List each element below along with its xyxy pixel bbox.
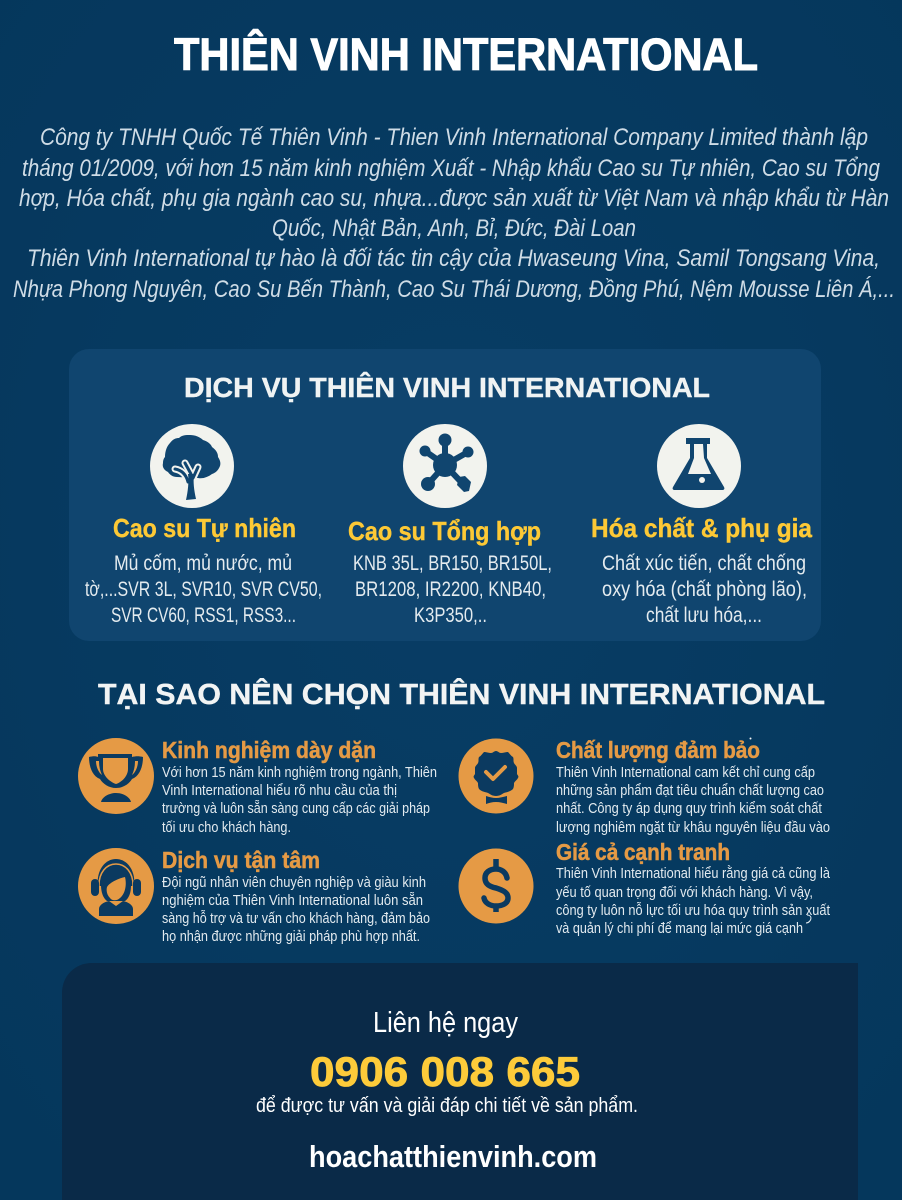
- description: Thiên Vinh International cam kết chỉ cung cấp: [556, 765, 815, 781]
- icon: trophy: [78, 738, 154, 814]
- icon: dollar: [458, 848, 534, 924]
- description: và quản lý chi phí để mang lại mức giá cạnh: [556, 921, 803, 937]
- description: họ nhận được những giải pháp phù hợp nhất.: [162, 929, 420, 945]
- column: synthetic rubber: KNB 35L, BR150, BR150L,: [353, 552, 552, 575]
- reason: quality: [458, 737, 830, 836]
- why choose heading: TẠI SAO NÊN CHỌN THIÊN VINH INTERNATIONAL: [98, 677, 825, 711]
- contact label: Liên hệ ngay: [373, 1007, 518, 1039]
- description: Với hơn 15 năm kinh nghiệm trong ngành, Thiên: [162, 765, 437, 781]
- intro text block: [13, 124, 895, 303]
- icon: headset agent: [78, 848, 154, 924]
- column: synthetic rubber: K3P350,..: [414, 604, 487, 627]
- description: [556, 765, 830, 836]
- description: công ty luôn nỗ lực tối ưu hóa quy trình sản xuất: [556, 902, 830, 919]
- reason: competitive price: [458, 839, 831, 937]
- column: chemicals: chất lưu hóa,...: [646, 604, 762, 627]
- column: natural rubber: tờ,...SVR 3L, SVR10, SVR CV50,: [85, 578, 322, 601]
- heading: Dịch vụ tận tâm: [162, 847, 320, 873]
- column: natural rubber: [85, 513, 322, 627]
- heading: Giá cả cạnh tranh: [556, 839, 730, 865]
- description: nhất. Công ty áp dụng quy trình kiểm soát chất: [556, 801, 822, 817]
- panel: services: [69, 349, 821, 641]
- column: chemicals: Chất xúc tiến, chất chống: [602, 552, 806, 575]
- description: tối ưu cho khách hàng.: [162, 820, 291, 836]
- description: Thiên Vinh International hiểu rằng giá cả cũng là: [556, 865, 831, 882]
- description: yếu tố quan trọng đối với khách hàng. Vì vậy,: [556, 885, 813, 901]
- description: [162, 765, 437, 836]
- heading: Kinh nghiệm dày dặn: [162, 737, 376, 763]
- column: chemicals: oxy hóa (chất phòng lão),: [602, 578, 807, 601]
- intro text block: Quốc, Nhật Bản, Anh, Bỉ, Đức, Đài Loan: [272, 215, 636, 242]
- panel: contact: [62, 963, 858, 1200]
- description: những sản phẩm đạt tiêu chuẩn chất lượng cao: [556, 783, 824, 799]
- column: synthetic rubber: BR1208, IR2200, KNB40,: [355, 578, 546, 601]
- contact note: để được tư vấn và giải đáp chi tiết về sản phẩm.: [256, 1095, 638, 1117]
- reason: experience: [78, 737, 437, 836]
- description: [162, 875, 430, 945]
- phone number: 0906 008 665: [310, 1048, 580, 1095]
- icon: tree: [150, 424, 234, 508]
- icon: flask: [657, 424, 741, 508]
- column: synthetic rubber: Cao su Tổng hợp: [348, 516, 541, 546]
- column: natural rubber: Cao su Tự nhiên: [113, 513, 296, 543]
- title: THIÊN VINH INTERNATIONAL: [174, 29, 758, 80]
- description: sàng hỗ trợ và tư vấn cho khách hàng, đảm bảo: [162, 910, 430, 927]
- website: hoachatthienvinh.com: [309, 1139, 597, 1174]
- column: natural rubber: SVR CV60, RSS1, RSS3...: [111, 604, 296, 627]
- column: synthetic rubber: [348, 516, 552, 627]
- column: natural rubber: Mủ cốm, mủ nước, mủ: [114, 552, 292, 575]
- column: chemicals: [591, 513, 812, 627]
- description: Đội ngũ nhân viên chuyên nghiệp và giàu kinh: [162, 875, 426, 891]
- description: trường và luôn sẵn sàng cung cấp các giải pháp: [162, 800, 430, 817]
- reason: dedicated service: [78, 847, 430, 945]
- description: nghiệm của Thiên Vinh International luôn sẵn: [162, 892, 423, 909]
- description: Vinh International hiểu rõ nhu cầu của thị: [162, 783, 397, 799]
- description: lượng nghiêm ngặt từ khâu nguyên liệu đầu vào: [556, 820, 830, 836]
- heading: Chất lượng đảm bảo: [556, 737, 760, 763]
- description: [556, 865, 831, 937]
- services heading: DỊCH VỤ THIÊN VINH INTERNATIONAL: [184, 372, 710, 403]
- column: chemicals: Hóa chất & phụ gia: [591, 513, 812, 543]
- icon: quality badge: [458, 738, 534, 814]
- icon: molecule: [403, 424, 487, 508]
